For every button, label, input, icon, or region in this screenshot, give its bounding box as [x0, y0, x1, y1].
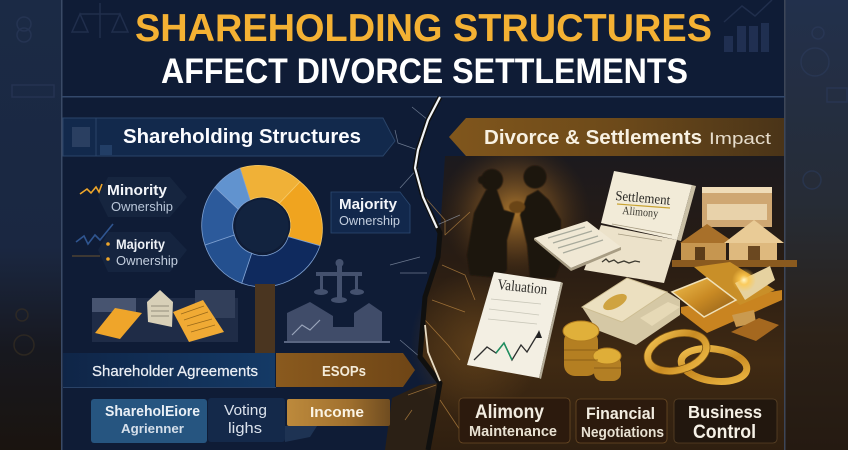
callout: majority ownership small: Ownership: [116, 253, 178, 268]
box: shareholder agreement: [91, 399, 207, 443]
heading banner: shareholding structures: [63, 118, 395, 156]
icon: buildings: [284, 302, 390, 343]
box: financial negotiations: Negotiations: [581, 425, 664, 441]
title: AFFECT DIVORCE SETTLEMENTS: [161, 52, 688, 91]
panel: shareholding structures: [63, 118, 415, 443]
panel: divorce and settlements: [449, 118, 797, 443]
heading banner: shareholding structures: Shareholding Structures: [123, 125, 361, 148]
box: financial negotiations: [576, 399, 667, 443]
band: shareholder agreements: Shareholder Agreements: [92, 363, 258, 380]
icon: property buildings: [672, 187, 797, 267]
box: voting rights: Voting: [224, 402, 267, 419]
document: valuation: [467, 272, 563, 379]
document: valuation: Valuation: [497, 277, 548, 298]
box: financial negotiations: Financial: [586, 404, 655, 423]
icon: wedding rings: [643, 327, 749, 385]
title: SHAREHOLDING STRUCTURES: [135, 7, 712, 50]
box: voting rights: lighs: [228, 420, 262, 437]
icon: gold coins: [563, 321, 621, 381]
document: settlement alimony: [584, 171, 696, 283]
callout: minority ownership: Ownership: [111, 199, 173, 214]
box: business control: Business: [688, 402, 762, 422]
faint side icons: [12, 0, 847, 355]
icon: cash stacks: [582, 278, 680, 345]
box: business control: Control: [693, 422, 756, 443]
crack divider: [390, 97, 475, 450]
title: [135, 7, 712, 91]
arrow: ESOPs: ESOPs: [322, 363, 366, 380]
callout: majority ownership small: [72, 224, 187, 272]
document: settlement alimony: Settlement: [615, 189, 671, 209]
icon: scales of justice: [314, 259, 364, 303]
callout: minority ownership: [80, 177, 187, 217]
icon: faint bar chart: [724, 23, 769, 52]
box: business control: [674, 399, 777, 443]
callout: majority ownership right: Majority: [339, 197, 397, 213]
callout: majority ownership right: [331, 192, 410, 233]
box: shareholder agreement: ShareholEiore: [105, 403, 200, 420]
document: settlement alimony: Alimony: [622, 205, 659, 220]
box: shareholder agreement: Agrienner: [121, 421, 184, 436]
heading banner: divorce and settlements impact: Impact: [709, 129, 771, 148]
box: alimony maintenance: Maintenance: [469, 423, 557, 440]
arrow: ESOPs: [276, 353, 415, 387]
callout: majority ownership right: Ownership: [339, 213, 400, 228]
box: income: Income: [310, 404, 364, 421]
callout: majority ownership small: Majority: [116, 237, 165, 252]
heading banner: divorce and settlements impact: Divorce & Settlements: [484, 126, 702, 149]
vertical connector: [255, 284, 275, 354]
icon: documents illustration: [92, 290, 238, 342]
box: income: [287, 399, 390, 426]
box: voting rights: [208, 398, 317, 442]
box: alimony maintenance: [459, 398, 570, 443]
box: alimony maintenance: Alimony: [475, 402, 544, 423]
band: shareholder agreements: [63, 353, 275, 387]
heading banner: divorce and settlements impact: [449, 118, 784, 156]
donut chart: [202, 165, 322, 287]
document: agreement page: [534, 221, 621, 271]
icon: couple silhouette: [467, 166, 561, 278]
callout: minority ownership: Minority: [107, 182, 168, 199]
icon: gold bars and cash: [672, 262, 782, 341]
